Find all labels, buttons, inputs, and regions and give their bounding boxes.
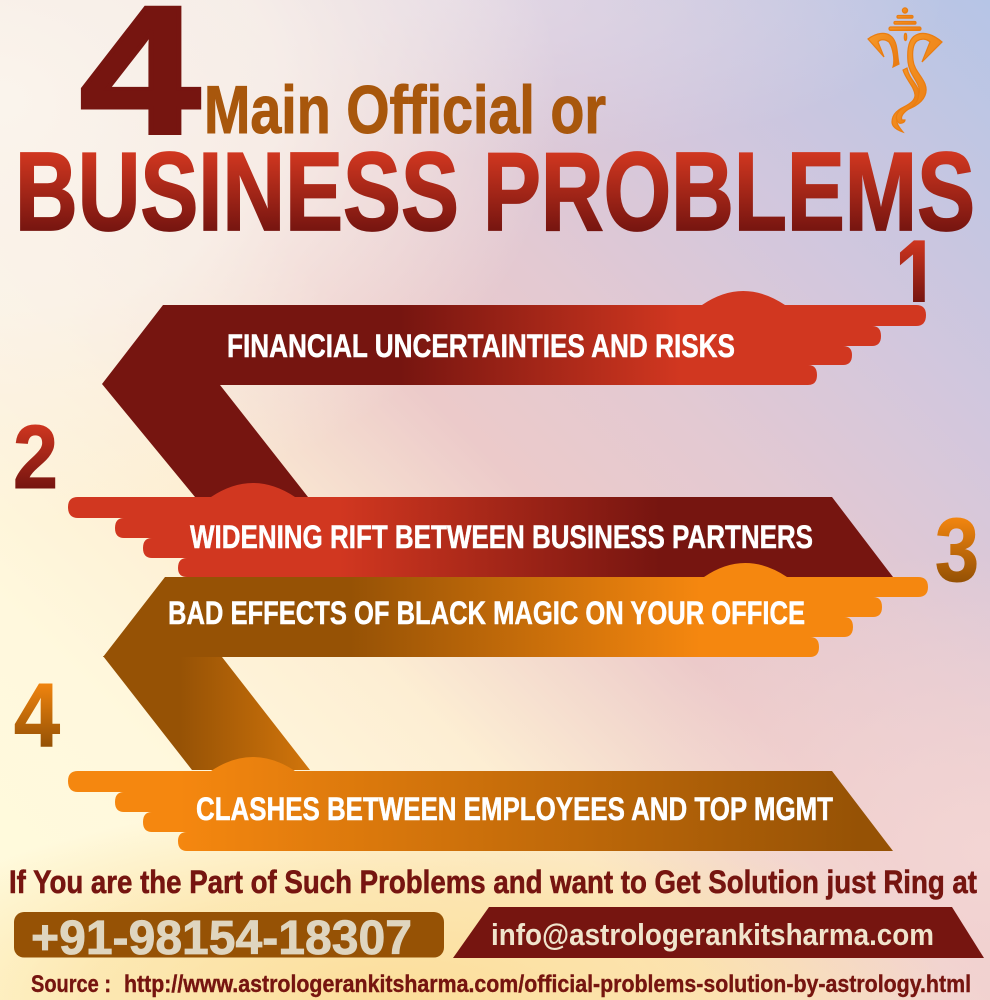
email address: info@astrologerankitsharma.com xyxy=(491,917,934,952)
phone number: +91-98154-18307 xyxy=(31,912,412,965)
text: financial uncertainties: FINANCIAL UNCERTAINTIES AND RISKS xyxy=(227,328,735,364)
text: black magic: BAD EFFECTS OF BLACK MAGIC ON YOUR OFFICE xyxy=(168,595,805,631)
ribbon 3: black magic xyxy=(103,563,928,770)
ribbon 2: widening rift xyxy=(68,483,893,577)
icon: Ganesha emblem xyxy=(868,8,942,132)
text: clashes: CLASHES BETWEEN EMPLOYEES AND TOP MGMT xyxy=(196,791,833,827)
title: Main Official or: Main Official or xyxy=(204,72,606,148)
source line: Source : xyxy=(31,971,111,998)
text: widening rift: WIDENING RIFT BETWEEN BUSINESS PARTNERS xyxy=(190,519,813,555)
email panel xyxy=(453,907,984,958)
number 3: 3 xyxy=(935,501,979,601)
number 2: 2 xyxy=(13,408,58,508)
ribbon 4: clashes xyxy=(68,757,893,851)
number 1: 1 xyxy=(895,219,939,337)
ribbon 1: financial uncertainties xyxy=(102,291,926,497)
number 4: 4 xyxy=(14,666,60,766)
phone panel xyxy=(14,912,444,965)
